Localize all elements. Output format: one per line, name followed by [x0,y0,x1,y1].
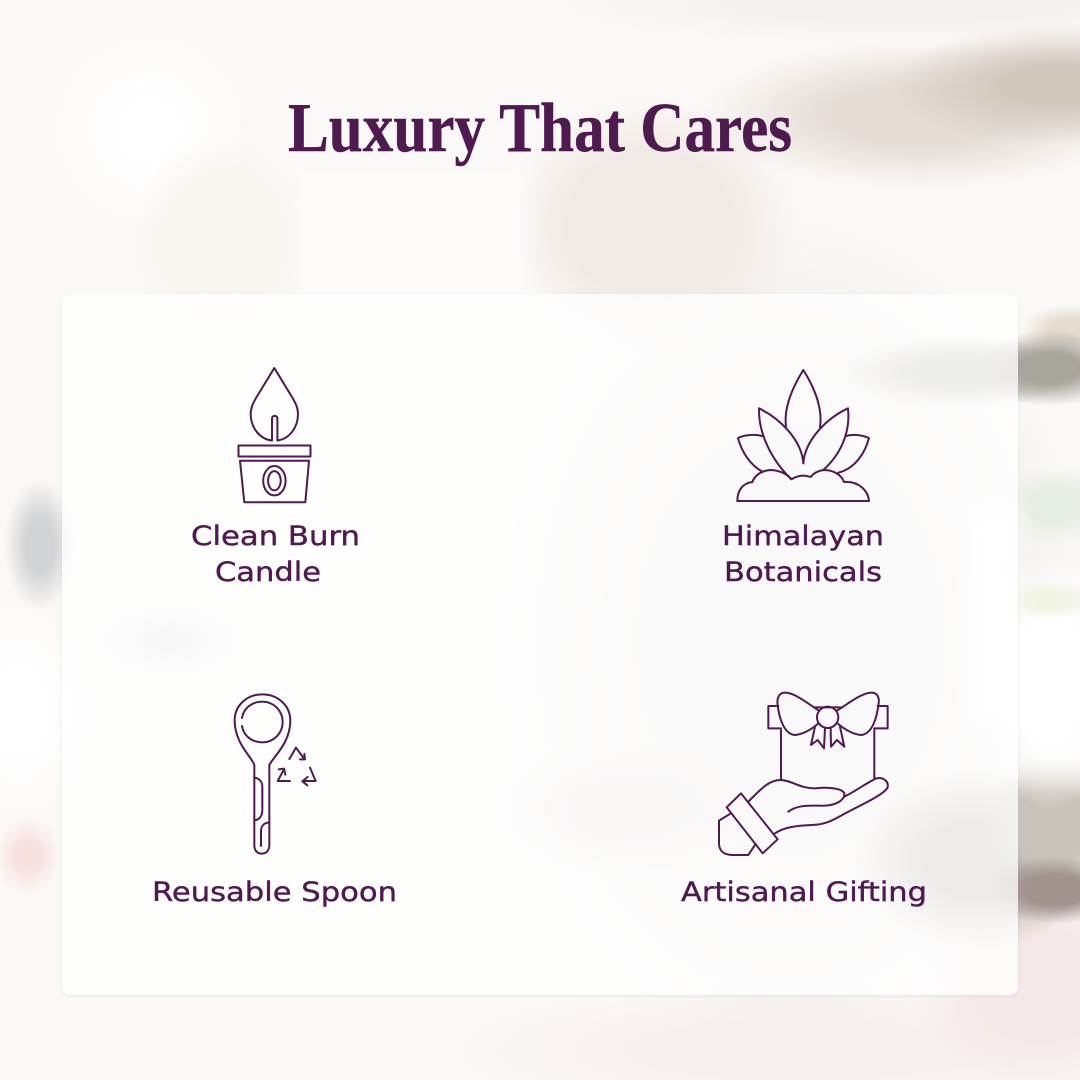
label: Reusable Spoon: Reusable Spoon [152,877,397,908]
label: Clean Burn Candle [191,521,360,588]
panel: features card [62,294,1018,995]
label: Himalayan Botanicals: Himalayan [722,521,884,552]
label: Clean Burn Candle: Clean Burn [191,521,360,552]
icon: gift on open hand [719,693,888,855]
label: Artisanal Gifting: Artisanal Gifting [681,877,927,908]
label: Himalayan Botanicals: Botanicals [724,557,882,588]
label: Clean Burn Candle: Candle [215,557,321,588]
icon: lotus botanicals [737,370,869,501]
icon: candle [238,368,310,502]
icon: reusable spoon [235,694,316,854]
label: Himalayan Botanicals [722,521,884,588]
title: Luxury That Cares [288,90,792,167]
